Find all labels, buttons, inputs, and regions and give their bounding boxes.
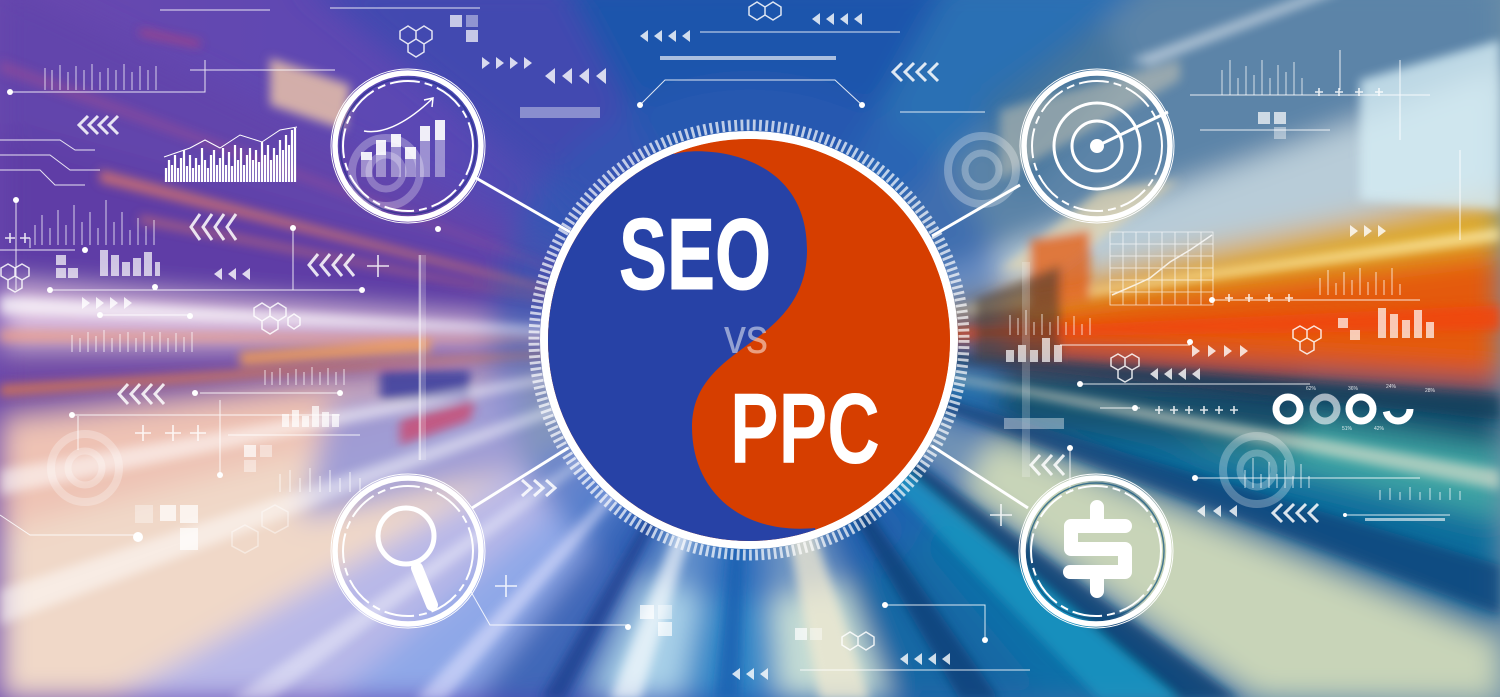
icon: bar chart — [331, 69, 485, 223]
HUD thin waveforms — [35, 60, 1460, 500]
white bar chart with trend line — [164, 127, 297, 182]
donut rings with percentages: 62% — [1306, 386, 1317, 392]
watermark spirals — [51, 136, 1291, 504]
central yin-yang disc — [540, 131, 958, 549]
HUD plus-sign rows — [5, 88, 1383, 597]
donut rings with percentages: 24% — [1386, 384, 1397, 390]
donut rings with percentages: 42% — [1374, 426, 1385, 432]
grid chart icon — [1110, 232, 1213, 305]
tick ring around central disc — [534, 125, 964, 555]
HUD circuit lines and nodes: right — [470, 50, 1460, 670]
PPC label: PPC — [730, 373, 880, 485]
icon: dollar sign — [1019, 474, 1173, 628]
vs label: vs — [724, 310, 768, 364]
HUD node dots: right — [882, 297, 1347, 643]
connector lines from centre to icons — [472, 178, 1028, 508]
HUD chevron arrows — [79, 63, 1318, 522]
donut rings with percentages — [1276, 384, 1436, 432]
SEO label: SEO — [619, 199, 771, 311]
donut rings with percentages: 51% — [1342, 426, 1353, 432]
blue SEO half — [548, 139, 950, 541]
HUD node dots: left and top — [7, 89, 865, 630]
donut rings with percentages: 28% — [1425, 388, 1436, 394]
HUD circuit lines and nodes: left — [0, 8, 900, 535]
icon: target — [1020, 69, 1174, 223]
icon: magnifying glass — [331, 474, 485, 628]
donut rings with percentages: 36% — [1348, 386, 1359, 392]
